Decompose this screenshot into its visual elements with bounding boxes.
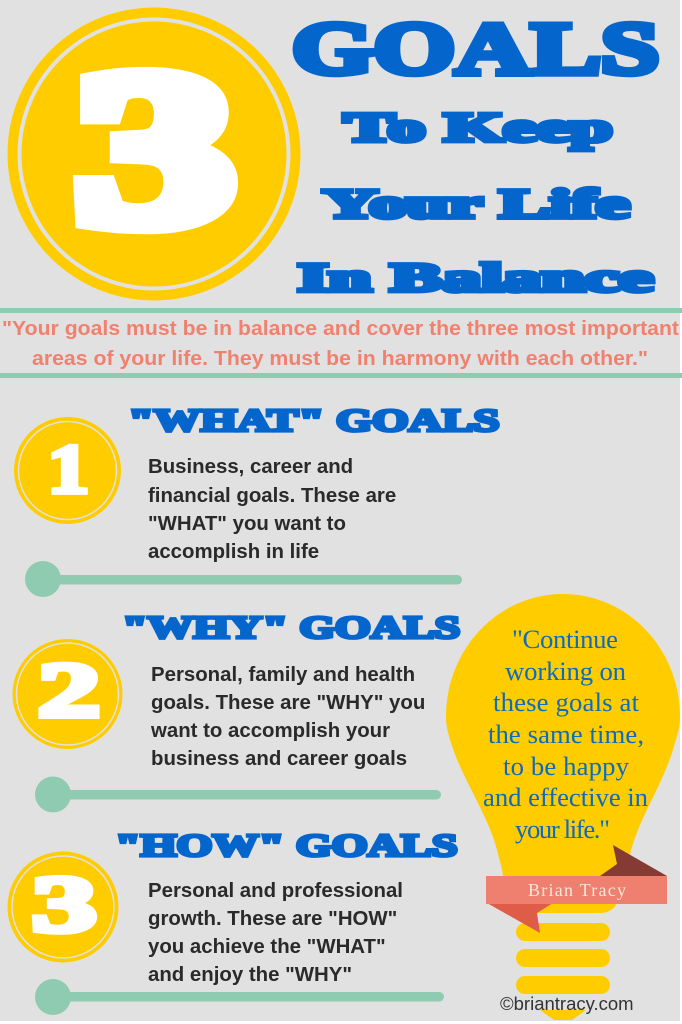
badge: number 1: 1	[48, 431, 89, 508]
bulb quote text: to be happy	[503, 751, 630, 781]
bulb quote text: "Continue	[512, 624, 618, 654]
divider slider 1	[25, 561, 462, 597]
quote banner: "Your goals must be in balance and cover the three most important	[2, 318, 679, 340]
title	[292, 7, 659, 300]
badge: number 3	[8, 852, 118, 962]
ribbon: Brian Tracy	[486, 845, 667, 933]
heading: how goals: "HOW" GOALS	[115, 828, 458, 863]
text: what goals description: Business, career and	[148, 456, 353, 478]
light bulb quote	[446, 594, 680, 1020]
divider slider 3	[35, 979, 444, 1015]
heading: why goals: "WHY" GOALS	[122, 610, 460, 645]
bulb quote text: working on	[505, 656, 626, 686]
text: what goals description: "WHAT" you want to	[148, 513, 346, 535]
text: how goals description: growth. These are "HOW"	[148, 908, 397, 930]
text: how goals description: Personal and professional	[148, 880, 403, 902]
icon: light bulb	[446, 594, 680, 1020]
heading: what goals: "WHAT" GOALS	[128, 402, 499, 438]
copyright: ©briantracy.com	[500, 993, 634, 1014]
title: To Keep	[344, 105, 612, 151]
title: Your Life	[323, 181, 629, 227]
quote banner: areas of your life. They must be in harmony with each other."	[32, 348, 648, 370]
badge: number 3: 3	[32, 860, 97, 949]
bulb quote text: these goals at	[493, 687, 640, 717]
text: how goals description: you achieve the "WHAT"	[148, 936, 386, 958]
bulb quote text: and effective in	[483, 782, 648, 812]
badge: number 2	[12, 639, 122, 749]
badge: number 1	[14, 417, 121, 524]
title: In Balance	[298, 256, 653, 300]
text: why goals description: want to accomplish your	[150, 720, 390, 742]
text: why goals description: Personal, family and health	[151, 664, 415, 686]
divider slider 2	[35, 776, 441, 812]
badge: number 2: 2	[38, 648, 100, 733]
ribbon: Brian Tracy: Brian Tracy	[528, 880, 626, 900]
text: what goals description: financial goals. These are	[148, 485, 396, 507]
title: GOALS	[292, 7, 659, 90]
text: why goals description: goals. These are "WHY" you	[151, 692, 425, 714]
quote banner	[0, 308, 682, 378]
badge: big number 3: 3	[76, 26, 234, 269]
text: why goals description: business and career goals	[151, 748, 407, 770]
bulb quote text: your life."	[515, 814, 610, 844]
bulb quote text: the same time,	[488, 719, 644, 749]
text: what goals description: accomplish in life	[148, 541, 319, 563]
badge: big number 3	[8, 8, 300, 300]
text: how goals description: and enjoy the "WHY"	[148, 964, 352, 986]
